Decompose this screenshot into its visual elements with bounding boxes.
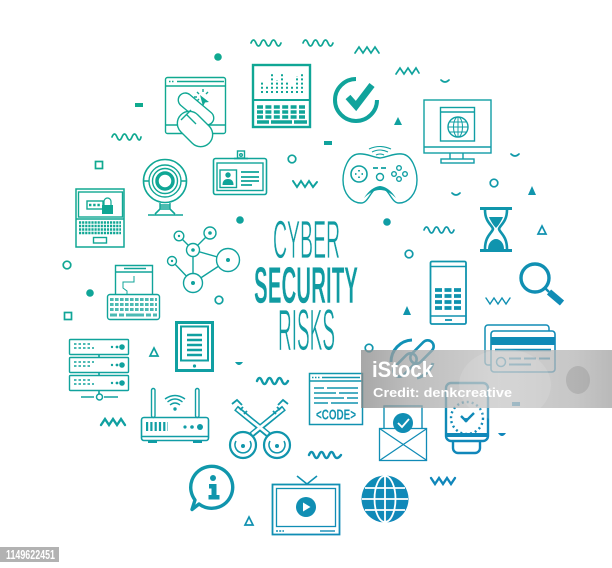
icon: desktop monitor with globe	[424, 100, 491, 163]
icon: credit cards	[485, 325, 555, 372]
infographic artwork: RISKS	[278, 298, 335, 363]
icon: chain link	[391, 338, 436, 379]
icon: smartphone	[430, 262, 466, 324]
title	[254, 210, 358, 363]
icon: ID badge	[214, 151, 266, 194]
icon: information speech bubble	[191, 466, 233, 510]
infographic artwork	[63, 40, 562, 534]
small decorative shapes	[63, 40, 546, 525]
icon: laptop with equaliser	[253, 65, 310, 127]
icon: keyboard with browser	[108, 266, 160, 320]
icon: smart watch	[446, 383, 488, 453]
icon: server rack	[70, 340, 128, 400]
icon: webcam	[143, 160, 187, 215]
image ID tag	[0, 547, 59, 562]
icon: laptop with padlock	[76, 189, 124, 247]
icon: code window: <CODE>	[316, 406, 356, 424]
icon: browser window and mouse	[166, 78, 226, 152]
infographic artwork: SECURITY	[254, 257, 358, 315]
icon: check mark in circle	[335, 79, 377, 121]
icon: email envelope with check	[380, 406, 427, 460]
icon: television with play button	[272, 476, 340, 534]
watermark band	[361, 349, 612, 421]
icon: wifi router	[142, 388, 208, 443]
icon: globe	[362, 476, 408, 522]
infographic artwork: CYBER	[273, 210, 340, 270]
icon: magnifying glass	[521, 264, 562, 303]
image ID tag: 1149622451	[6, 548, 55, 562]
icon: network nodes	[168, 227, 240, 292]
small filled shapes	[86, 53, 536, 436]
icon: tablet	[176, 322, 212, 370]
icon: crossed keys	[230, 400, 290, 458]
icon: game controller	[343, 146, 417, 203]
icon: hourglass	[480, 208, 512, 250]
icon: code window	[310, 374, 362, 424]
watermark band: Credit: denkcreative	[373, 385, 512, 400]
watermark band: iStock	[372, 357, 434, 382]
